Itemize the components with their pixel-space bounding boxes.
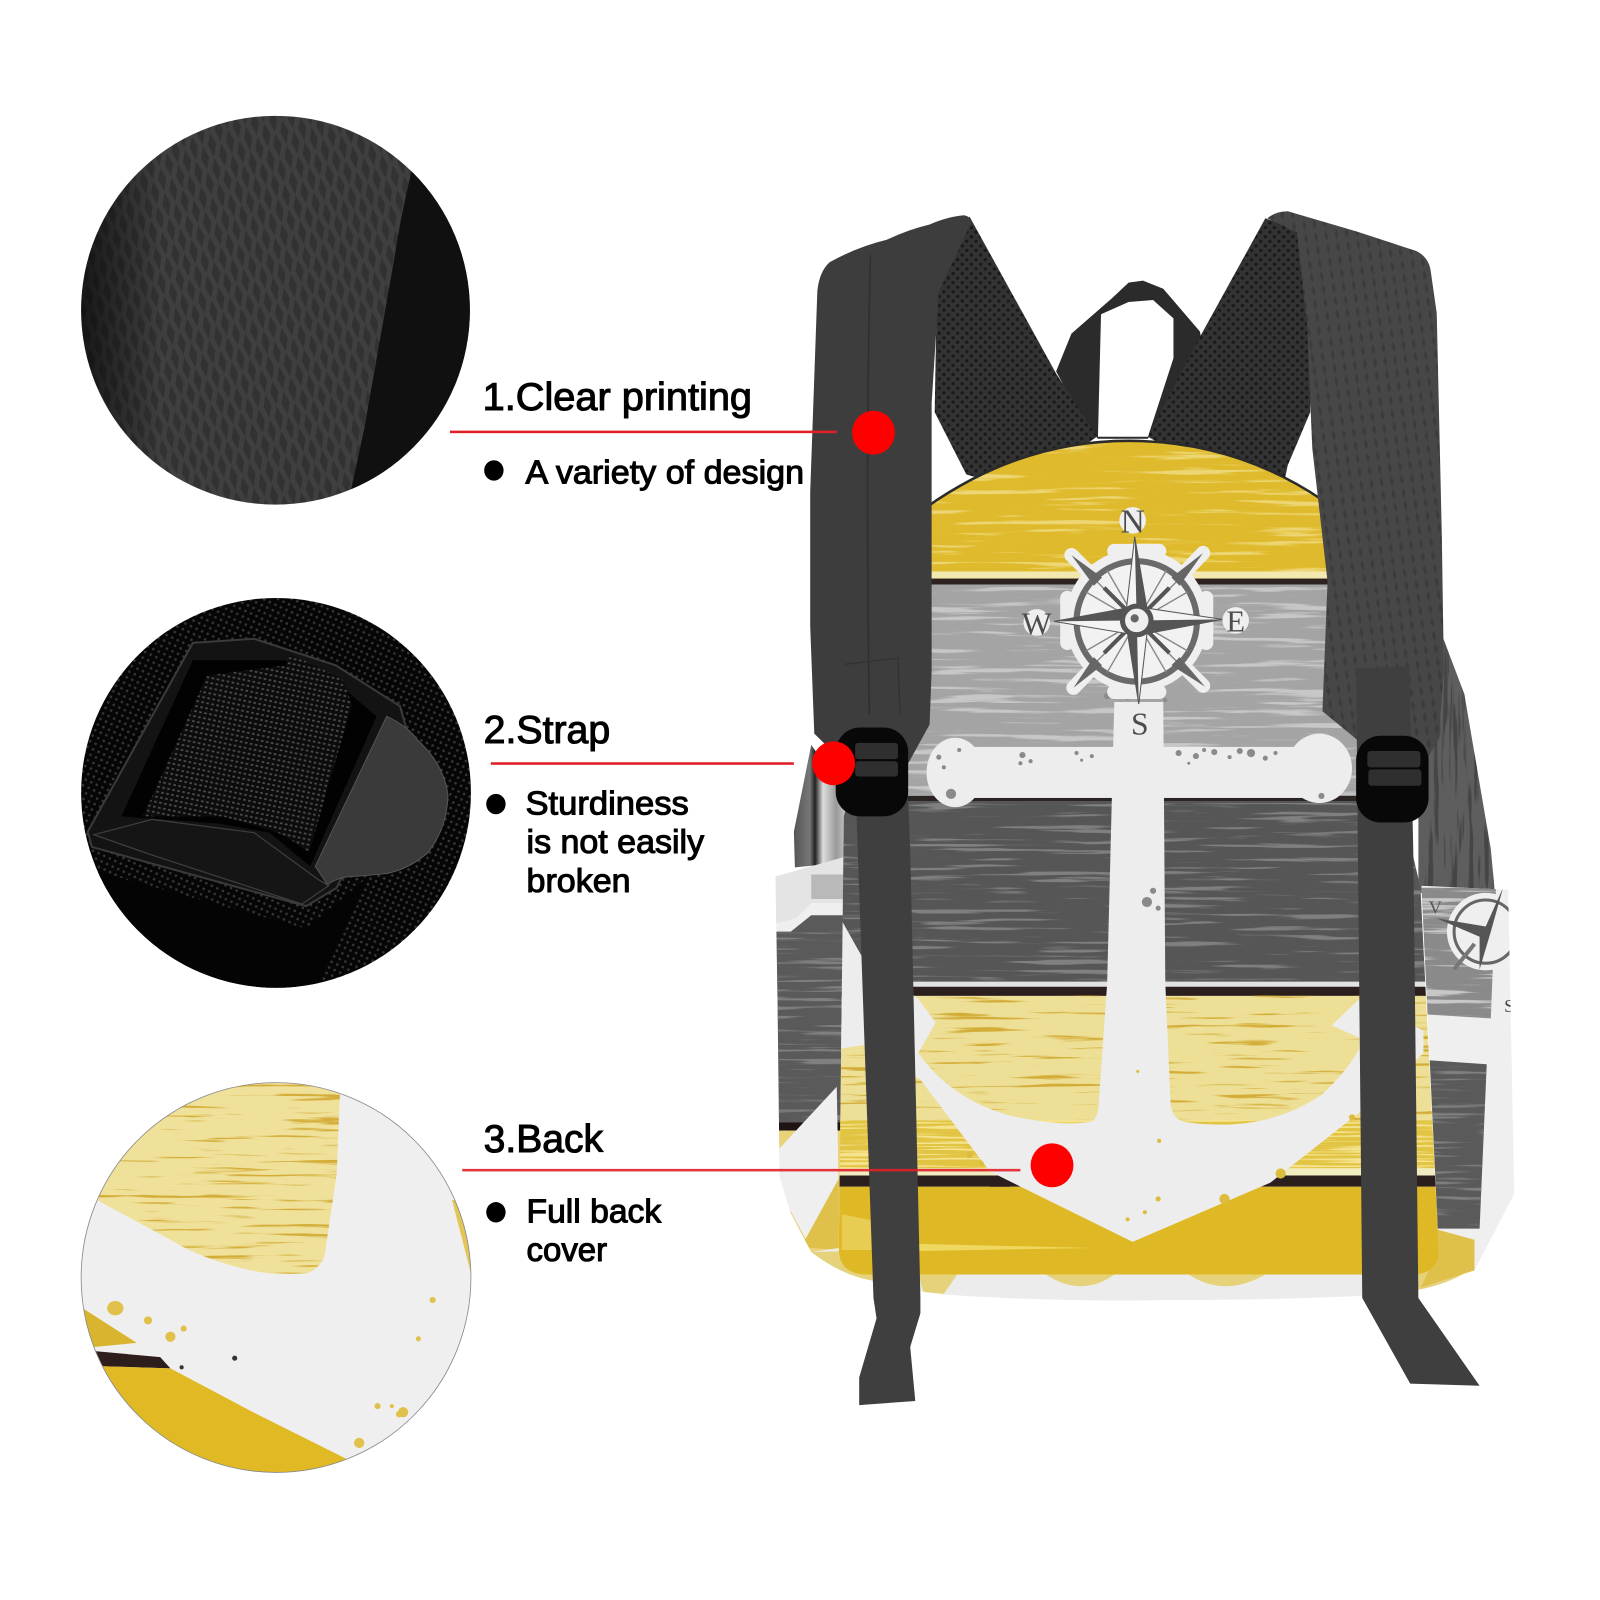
leader line 1 [450,431,837,433]
bullet text: sturdiness: broken [527,863,631,900]
handle loop [1056,281,1203,439]
bullet text: sturdiness: Sturdiness [526,785,689,822]
light wood [98,1083,340,1274]
right buckle [1356,736,1429,822]
right upper side panel [1418,622,1496,894]
compass letters: S [1131,707,1149,742]
right padded shoulder strap [1267,211,1444,760]
bullet text: sturdiness: is not easily [527,824,704,861]
dark gold wedge [103,1366,346,1472]
right side pocket [1420,886,1514,1288]
leather tab [315,716,448,885]
panel top edge [927,441,1322,507]
compass diagonal pointers [1071,553,1205,688]
woven strap fold [285,657,352,852]
detail circle: strap buckle [81,598,471,988]
right sliver [452,1200,470,1272]
right webbing strap [1356,666,1480,1386]
buckle lower edge [94,819,329,904]
left webbing strap [855,776,920,1405]
pocket compass fragment: V [1429,897,1443,917]
leader line 3 [462,1169,1020,1171]
compass hub [1122,606,1151,635]
leader line 2 [491,762,794,765]
detail circle: print close-up [71,1071,480,1480]
marker dot 3 [1031,1143,1073,1187]
splashes [107,1297,436,1448]
compass points halo [1067,551,1206,692]
bullet text: sturdiness [486,785,704,900]
marker dot 2 [812,741,855,785]
compass letters: N [1120,504,1145,541]
yellow stripes at left [84,1309,137,1347]
pocket compass fragment [1428,890,1511,1012]
heading: clear printing: 1.Clear printing [483,375,752,419]
main star light facets [1054,537,1222,704]
bag bottom gusset [811,1224,1469,1301]
detail circle outline [81,1083,471,1472]
backpack illustration [770,211,1524,1405]
bullet text: full back cover: cover [527,1232,607,1269]
heading: back: 3.Back [484,1117,603,1161]
anchor speckles [936,687,1324,911]
left side pocket [776,857,844,1252]
buckle opening [121,660,377,866]
heading: strap: 2.Strap [484,708,610,752]
bullet text: full back cover: Full back [527,1193,661,1230]
wood grain [99,1084,340,1274]
pocket compass fragment: S [1504,996,1514,1016]
left buckle [836,728,908,816]
left upper side sliver [794,745,847,867]
main star dark facets [1054,537,1222,704]
back panel print [832,437,1444,1279]
detail circle: fabric mesh [71,106,480,514]
bullet text: full back cover [486,1193,661,1269]
right back mesh [1148,218,1312,480]
compass rose [1022,504,1245,742]
left back mesh [935,216,1097,490]
compass letters [1022,504,1245,742]
compass spokes [1086,570,1188,672]
woven strap [143,666,285,836]
bullet text: variety of design: A variety of design [526,455,804,492]
compass letters: W [1022,607,1052,642]
compass ring [1077,561,1197,682]
left padded shoulder strap [810,215,971,776]
anchor [839,687,1423,1242]
compass halo [1071,554,1202,686]
marker dot 1 [852,411,895,455]
letter halos [1029,512,1244,631]
compass letters: E [1226,605,1245,639]
minor star points [1104,588,1169,653]
buckle frame [88,639,408,906]
